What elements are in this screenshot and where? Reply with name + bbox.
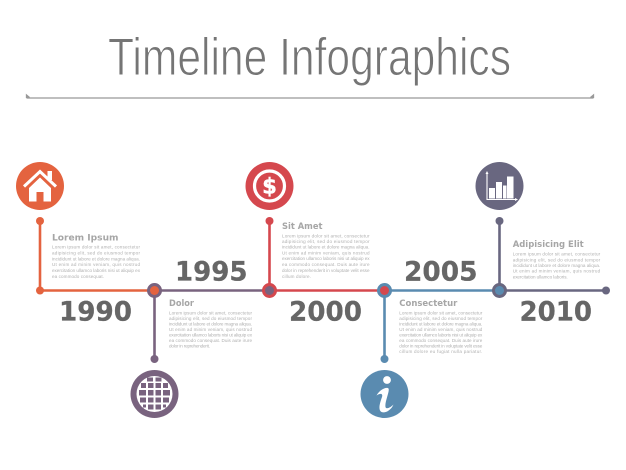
text block: Dolor: incididunt ut labore et dolore magna aliqua.	[169, 321, 252, 326]
year 1990: 1990	[59, 296, 132, 328]
text block: Lorem Ipsum: Lorem Ipsum	[52, 234, 118, 244]
text block: Sit Amet: incididunt ut labore et dolore magna aliqua.	[282, 245, 370, 250]
text block: Adipisicing Elit	[513, 240, 601, 280]
text block: Adipisicing Elit: exercitation ullamco laboris.	[513, 274, 568, 280]
icon: dollar coin: $	[262, 174, 277, 198]
text block: Consectetur: exercitation ullamco laboris nisi ut aliquip ex	[399, 332, 483, 337]
text block: Adipisicing Elit: incididunt ut labore et dolore magna aliqua.	[513, 263, 600, 268]
text block: Sit Amet: Sit Amet	[282, 222, 323, 232]
connector 1995	[147, 283, 162, 363]
text block: Lorem Ipsum: exercitation ullamco laboris nisi ut aliquip ex	[52, 268, 141, 273]
text block: Lorem Ipsum: incididunt ut labore et dolore magna aliqua.	[52, 256, 140, 261]
text block: Consectetur: Ut enim ad minim veniam, quis nostrud	[399, 327, 483, 332]
year 2010: 2010	[520, 296, 592, 328]
text block: Sit Amet: dolor in reprehenderit in voluptate velit esse	[282, 268, 370, 273]
text block: Sit Amet	[282, 222, 370, 279]
milestone 1995	[130, 256, 253, 418]
text block: Dolor: dolor in reprehenderit.	[169, 344, 210, 349]
text block: Dolor: Lorem ipsum dolor sit amet, consectetur	[169, 310, 252, 315]
milestone 2005	[360, 256, 483, 418]
year 1995: 1995	[175, 256, 248, 288]
text block: Dolor: Dolor	[169, 299, 194, 309]
text block: Lorem Ipsum: Ut enim ad minim veniam, quis nostrud	[52, 262, 140, 267]
text block: Sit Amet: adipisicing elit, sed do eiusmod tempor	[282, 239, 370, 244]
text block: Consectetur: ea commodo consequat. Duis aute irure	[399, 338, 483, 343]
text block: Consectetur: Lorem ipsum dolor sit amet, consectetur	[399, 310, 483, 315]
connector 2005	[377, 283, 392, 363]
text block: Lorem Ipsum	[52, 234, 141, 279]
icon: bar chart	[476, 162, 524, 210]
text block: Dolor: adipisicing elit, sed do eiusmod tempor	[169, 316, 252, 321]
text block: Consectetur: incididunt ut labore et dolore magna aliqua.	[399, 321, 482, 326]
connector 2010	[492, 217, 610, 298]
text block: Adipisicing Elit: Adipisicing Elit	[513, 240, 584, 250]
milestone 2000	[246, 162, 370, 328]
text block: Consectetur: dolor in reprehenderit in voluptate velit esse	[399, 344, 483, 349]
icon: information	[360, 370, 408, 418]
text block: Dolor: ea commodo consequat. Duis aute irure	[169, 338, 252, 343]
text block: Adipisicing Elit: Ut enim ad minim veniam, quis nostrud	[513, 269, 601, 274]
text block: Adipisicing Elit: adipisicing elit, sed do eiusmod tempor	[513, 257, 601, 262]
icon: globe	[130, 370, 178, 418]
year 2005: 2005	[404, 256, 478, 288]
text block: Dolor	[169, 299, 253, 349]
text block: Consectetur: adipisicing elit, sed do eiusmod tempor	[399, 316, 483, 321]
text block: Sit Amet: exercitation ullamco laboris nisi ut aliquip ex	[282, 256, 370, 261]
text block: Sit Amet: ea commodo consequat. Duis aute irure	[282, 262, 370, 267]
text block: Lorem Ipsum: ea commodo consequat.	[52, 274, 104, 279]
text block: Sit Amet: Ut enim ad minim veniam, quis nostrud	[282, 250, 370, 255]
timeline axis	[40, 289, 606, 292]
year 2000: 2000	[289, 296, 362, 328]
text block: Consectetur: Consectetur	[399, 299, 458, 309]
text block: Consectetur	[399, 299, 483, 354]
connector 2000	[262, 217, 277, 298]
title: Timeline Infographics	[108, 28, 511, 87]
connector 1990	[36, 217, 44, 294]
text block: Adipisicing Elit: Lorem ipsum dolor sit amet, consectetur	[513, 252, 601, 257]
text block: Consectetur: cillum dolore eu fugiat nulla pariatur.	[399, 349, 482, 354]
text block: Sit Amet: cillum dolore.	[282, 274, 311, 279]
milestone 2010	[476, 162, 610, 328]
title underline	[26, 95, 594, 98]
text block: Dolor: Ut enim ad minim veniam, quis nostrud	[169, 327, 252, 332]
milestone 1990	[16, 162, 141, 328]
icon: dollar coin	[246, 162, 294, 210]
icon: house	[16, 162, 64, 210]
text block: Sit Amet: Lorem ipsum dolor sit amet, consectetur	[282, 233, 370, 238]
text block: Lorem Ipsum: Lorem ipsum dolor sit amet, consectetur	[52, 245, 140, 250]
text block: Dolor: exercitation ullamco laboris nisi ut aliquip ex	[169, 332, 253, 337]
text block: Lorem Ipsum: adipisicing elit, sed do eiusmod tempor	[52, 251, 140, 256]
